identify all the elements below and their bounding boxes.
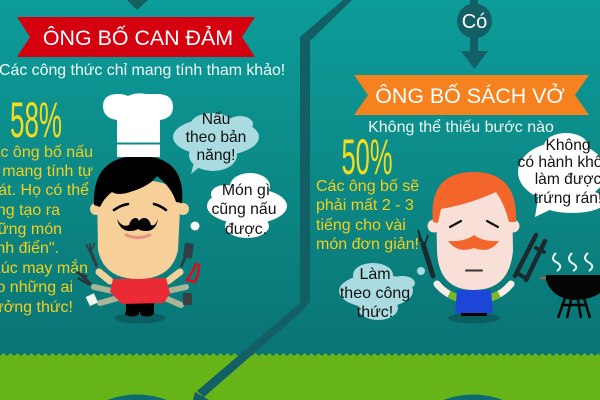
left description text bbox=[0, 144, 93, 316]
eyes bbox=[450, 221, 498, 227]
eyes bbox=[114, 204, 166, 210]
thought bubble: nấu theo bản năng bbox=[173, 111, 259, 174]
mouth bbox=[126, 235, 150, 238]
stat 50%: 50% bbox=[342, 129, 392, 185]
speech bubble: không có hành khô: làm được bbox=[535, 171, 600, 188]
feet bbox=[461, 310, 487, 316]
utensils bbox=[90, 250, 97, 267]
thought bubble: món gì cũng nấu được: cũng nấu bbox=[211, 201, 277, 218]
thought bubble: món gì cũng nấu được bbox=[190, 173, 287, 238]
green ground bbox=[0, 353, 600, 400]
ears bbox=[428, 220, 440, 232]
right description text bbox=[316, 178, 419, 253]
thought bubble: làm theo công thức bbox=[339, 263, 425, 321]
thought bubble: món gì cũng nấu được: Món gì bbox=[222, 182, 270, 199]
icon: grill bbox=[540, 253, 600, 318]
thought bubble: nấu theo bản năng: Nấu bbox=[202, 111, 230, 128]
thought bubble: nấu theo bản năng: theo bản bbox=[186, 129, 246, 146]
moustache bbox=[448, 235, 499, 250]
shirt bbox=[110, 278, 170, 304]
chef hat bbox=[103, 93, 173, 157]
shadow bbox=[115, 312, 165, 324]
thought bubble: làm theo công thức: Làm bbox=[359, 266, 391, 283]
thought bubble: nấu theo bản năng: năng! bbox=[196, 147, 236, 164]
banner: ông bố sách vở bbox=[354, 75, 589, 115]
speech bubble: không có hành khô: có hành khô bbox=[518, 154, 600, 171]
flow node: Có: Có bbox=[462, 11, 487, 33]
moustache bbox=[117, 218, 158, 231]
character: bookish dad bbox=[418, 172, 545, 324]
banner: ông bố can đảm bbox=[17, 17, 255, 57]
overalls bbox=[455, 290, 493, 313]
ears bbox=[90, 203, 102, 215]
thought bubble: làm theo công thức: thức! bbox=[357, 304, 393, 321]
hair bbox=[94, 156, 182, 207]
right description text: phải mất 2 - 3 bbox=[316, 197, 414, 214]
hair bbox=[433, 172, 516, 223]
flow node: Có bbox=[457, 0, 492, 69]
banner: ông bố can đảm: ÔNG BỐ CAN ĐẢM bbox=[43, 24, 233, 50]
flow line: long diagonal connector with arrowhead bbox=[193, 0, 352, 400]
tongs bbox=[515, 235, 545, 280]
speech bubble: không có hành khô: Không bbox=[545, 137, 591, 154]
arms bbox=[94, 272, 186, 305]
face bbox=[436, 180, 513, 290]
right description text: món đơn giản! bbox=[316, 236, 419, 253]
fork bbox=[423, 244, 433, 276]
feet bbox=[126, 303, 154, 312]
right description text: tiếng cho vài bbox=[316, 217, 406, 234]
mouth bbox=[466, 270, 482, 272]
right description text: Các ông bố sẽ bbox=[316, 178, 419, 195]
subtitle right: Không thể thiếu bước nào bbox=[368, 118, 554, 136]
thought bubble: món gì cũng nấu được: được. bbox=[225, 221, 267, 238]
character: brave dad chef bbox=[76, 93, 199, 323]
stat 58%: 58% bbox=[10, 92, 62, 148]
banner: ông bố sách vở: ÔNG BỐ SÁCH VỞ bbox=[375, 82, 565, 108]
circles at bottom edge bbox=[107, 394, 503, 400]
arms bbox=[437, 284, 511, 298]
face bbox=[97, 180, 181, 279]
shadow bbox=[448, 312, 500, 324]
thought bubble: làm theo công thức: theo công bbox=[340, 285, 410, 302]
subtitle left: Các công thức chỉ mang tính tham khảo! bbox=[0, 62, 285, 79]
arrow tip top left bbox=[127, 0, 148, 10]
speech bubble: không có hành khô bbox=[518, 133, 600, 217]
